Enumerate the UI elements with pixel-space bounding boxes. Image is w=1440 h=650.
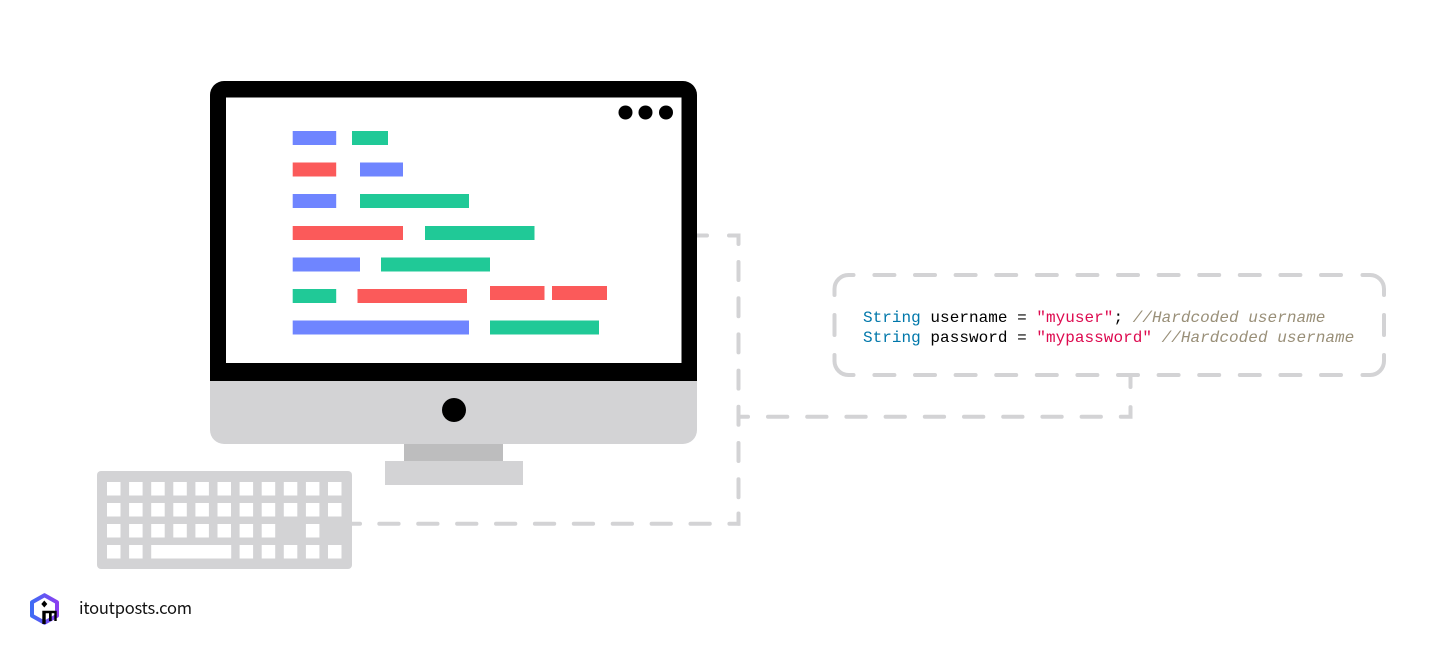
- logo text: itoutposts.com: [79, 595, 192, 619]
- code snippet text: String username = "myuser"; //Hardcoded username: [863, 309, 1325, 327]
- logo icon: [32, 595, 57, 624]
- monitor: [210, 81, 697, 485]
- code bars on screen: [293, 131, 607, 334]
- window dots: [618, 106, 673, 120]
- code box: dashed rounded panel: [834, 275, 1384, 375]
- connector: dashed lines linking monitor, keyboard and code box: [352, 236, 1130, 524]
- monitor button: [442, 398, 466, 422]
- monitor chin: [210, 381, 697, 444]
- monitor screen: [226, 98, 682, 363]
- keyboard: [97, 471, 352, 569]
- code snippet second line: String password = "mypassword" //Hardcoded username: [863, 329, 1354, 347]
- monitor bezel: [210, 81, 697, 381]
- monitor stand neck: [404, 444, 503, 461]
- monitor stand base: [385, 461, 523, 485]
